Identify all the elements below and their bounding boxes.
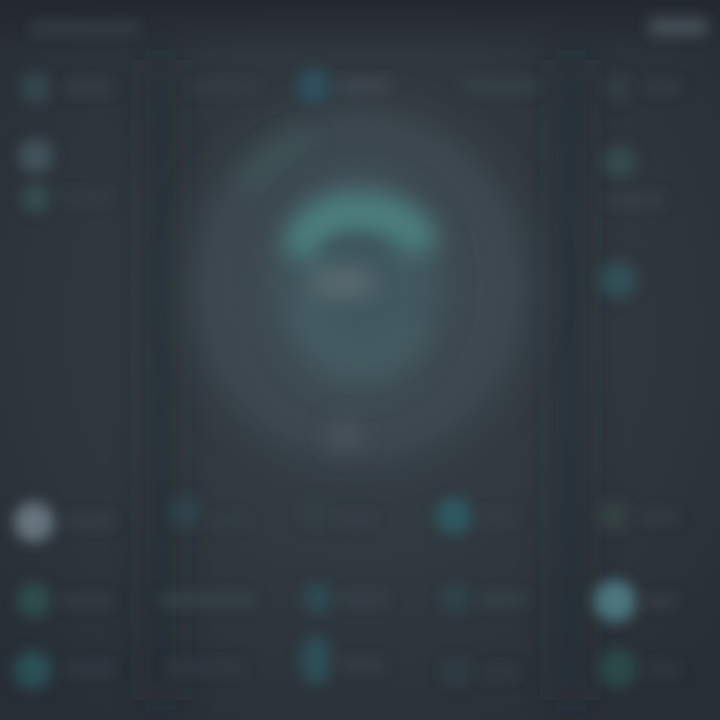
bottom grid row 1 [14,496,680,542]
text: row 2 col 3 [338,594,388,604]
icon: bright teal circle [594,580,636,622]
icon: row 3 col 3 [300,635,332,685]
text: row 3 col 1 [65,664,115,674]
bottom grid row 3 [14,635,680,689]
teal arc lower [305,300,418,360]
grey centre [308,270,376,296]
ring highlight upper left [245,140,310,190]
icon: row 2 col 3 [303,583,333,613]
icon: row 2 col 1 [17,583,51,617]
header bar [0,0,720,55]
header title [30,23,140,34]
icon: row 3 col 1 [14,651,52,689]
text: row 2 col 5 [645,596,677,606]
header button [648,18,708,36]
text: right 1 [605,195,665,205]
text: top 5 [642,82,682,92]
outer ring [208,125,508,445]
text: top 2 [190,82,260,93]
teal arc top [300,212,422,255]
icon: row 3 col 5 [599,649,637,687]
icon: row 2 col 4 [442,584,470,612]
text: top 1 [65,82,113,93]
outer halo [195,110,525,460]
text: top 3 [338,80,390,92]
text: left 2 [60,193,110,202]
text: row 3 col 2 [165,662,245,673]
bottom marker [329,419,361,451]
bottom grid row 2 [17,580,677,622]
text: row 1 col 1 [65,516,115,526]
icon: row 1 col 4 [436,498,472,534]
icon: top 3 [297,69,331,103]
icon: top 1 [21,73,51,103]
icon: right 1 [604,146,636,178]
icon: right 2 [600,262,636,298]
text: row 2 col 1 [60,596,115,606]
text: row 2 col 2 [160,594,255,606]
top row items [21,69,682,103]
text: row 3 col 5 [645,664,680,674]
icon: row 1 col 2 [170,496,202,528]
icon: row 3 col 4 [442,658,470,686]
text: top 4 [462,80,538,92]
icon: left 1 [19,139,53,173]
text: row 1 col 3 [335,514,375,524]
text: row 1 col 2 [210,516,250,525]
left column [19,139,110,212]
dark inner ring [322,244,385,252]
text: row 1 col 4 [480,512,518,522]
icon: row 1 col 3 [302,498,330,526]
text: row 3 col 3 [340,660,385,670]
icon: bright circle [14,502,54,542]
inner disc [274,174,442,390]
text: row 2 col 4 [478,594,528,605]
central circular chart [195,110,525,460]
text: row 1 col 5 [640,512,680,522]
right column [600,146,665,298]
icon: top 5 [605,75,631,101]
icon: row 1 col 5 [599,501,629,531]
vertical column shading [145,60,587,700]
icon: left 2 [22,184,50,212]
text: row 3 col 4 [478,668,520,678]
